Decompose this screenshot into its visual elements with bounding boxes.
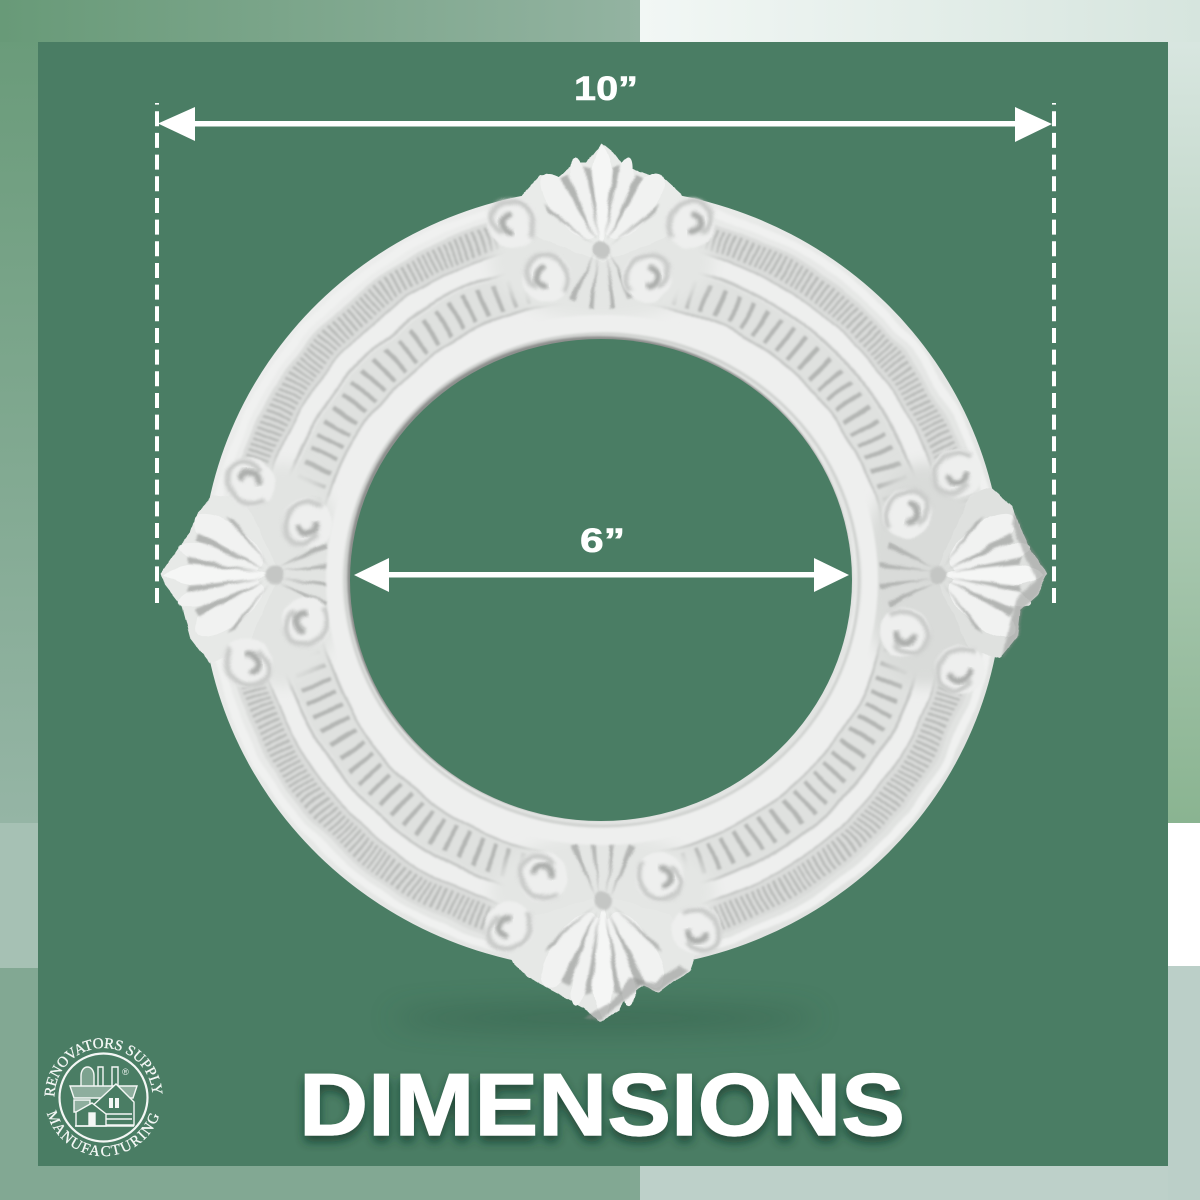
logo circular wordmark top: RENOVATORS SUPPLY: [44, 1038, 163, 1097]
inner rim band and shading: [334, 323, 870, 837]
arrow: 10 inch width: [158, 107, 1052, 142]
top ornament soft blend: [490, 204, 714, 320]
logo circular wordmark bottom: MANUFACTURING: [46, 1110, 159, 1156]
background: left strip: [0, 0, 38, 823]
medallion body: [201, 188, 1003, 970]
medallion relief bands: [210, 197, 994, 961]
arrow: 6 inch opening: [354, 558, 849, 592]
right ornament leaf: [880, 448, 1048, 695]
logo house icon: [70, 1067, 137, 1126]
outer dimension: right dashed guide: [1052, 103, 1056, 603]
background: left pale block: [0, 823, 38, 968]
background: left lower block: [0, 968, 38, 1200]
bottom ornament leaf: [485, 834, 722, 1022]
left ornament leaf: [161, 458, 336, 688]
background: top right strip: [640, 0, 1200, 42]
centre opening: [350, 339, 852, 821]
background: bottom right strip: [640, 1166, 1168, 1200]
background: bottom left strip: [38, 1166, 640, 1200]
ceiling medallion ring: [161, 143, 1048, 1022]
bottom ornament soft blend: [491, 834, 715, 950]
logo ring: [60, 1054, 148, 1142]
background: right strip: [1168, 42, 1200, 823]
background: top left strip: [0, 0, 640, 42]
ceiling medallion shadow: [390, 1006, 820, 1030]
background: right white block: [1168, 823, 1200, 966]
outer dimension: left dashed guide: [155, 103, 159, 603]
label: 10 inch: 10”: [574, 70, 638, 108]
right ornament soft blend: [863, 463, 987, 687]
top ornament leaf: [488, 143, 715, 308]
left ornament soft blend: [221, 463, 345, 687]
background: right lower block: [1168, 966, 1200, 1200]
logo registered mark: ®: [122, 1067, 129, 1077]
logo: Renovators Supply Manufacturing: [44, 1038, 163, 1156]
label: 6 inch: 6”: [580, 522, 625, 560]
title: DIMENSIONS: [299, 1055, 905, 1154]
